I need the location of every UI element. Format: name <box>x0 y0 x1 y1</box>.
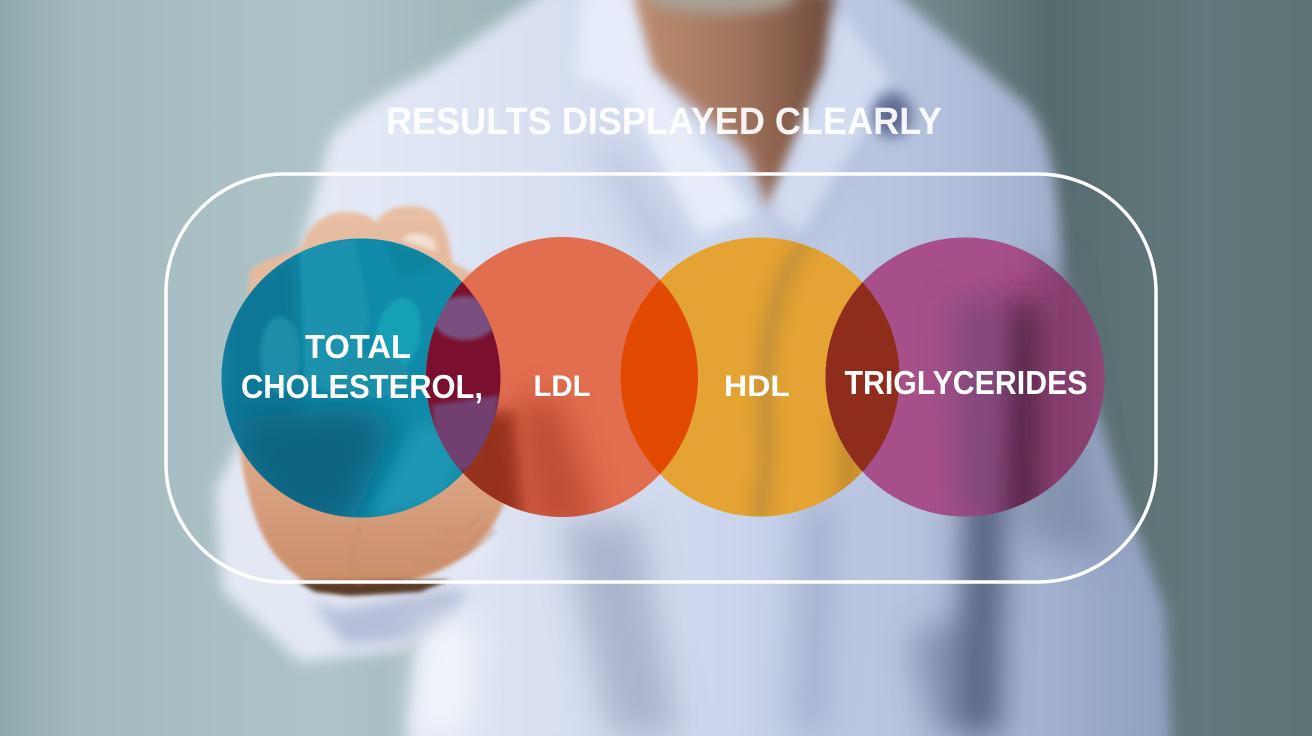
label: LDL: LDL <box>534 370 590 403</box>
panel: rounded results frame <box>166 174 1156 582</box>
cuff shadow <box>310 590 470 645</box>
heading: RESULTS DISPLAYED CLEARLY <box>386 101 942 143</box>
circle: triglycerides <box>826 230 1110 530</box>
label: triglycerides: TRIGLYCERIDES <box>844 364 1088 401</box>
hand <box>238 206 514 584</box>
fingers inside teal circle <box>222 240 470 530</box>
fingernail <box>402 233 438 252</box>
chin <box>645 0 795 14</box>
collar dark spot <box>872 93 912 137</box>
label: total cholesterol: TOTAL <box>305 328 411 365</box>
collar right <box>770 10 890 235</box>
fingernails showing in overlap <box>432 296 500 475</box>
circle: LDL <box>426 237 660 517</box>
shirt sleeve and cuff <box>215 430 500 662</box>
circle: teal and red overlap <box>426 282 500 473</box>
circle: LDL and HDL overlap <box>620 280 698 474</box>
shirt body <box>300 0 1172 736</box>
shading over shirt and hand <box>425 400 600 530</box>
label: total cholesterol: CHOLESTEROL, <box>241 368 483 405</box>
shirt fold shadows <box>410 140 1110 736</box>
palm creases <box>352 515 495 585</box>
label: HDL: HDL <box>724 370 790 403</box>
photo: person in white shirt <box>215 0 1172 736</box>
circle: total cholesterol <box>222 238 463 518</box>
neck skin <box>625 0 835 210</box>
circle: HDL <box>620 238 862 516</box>
circle: HDL and triglycerides overlap <box>826 282 900 472</box>
wrist shadow <box>298 580 450 596</box>
collar left <box>575 0 755 235</box>
label: total cholesterol <box>241 328 483 405</box>
